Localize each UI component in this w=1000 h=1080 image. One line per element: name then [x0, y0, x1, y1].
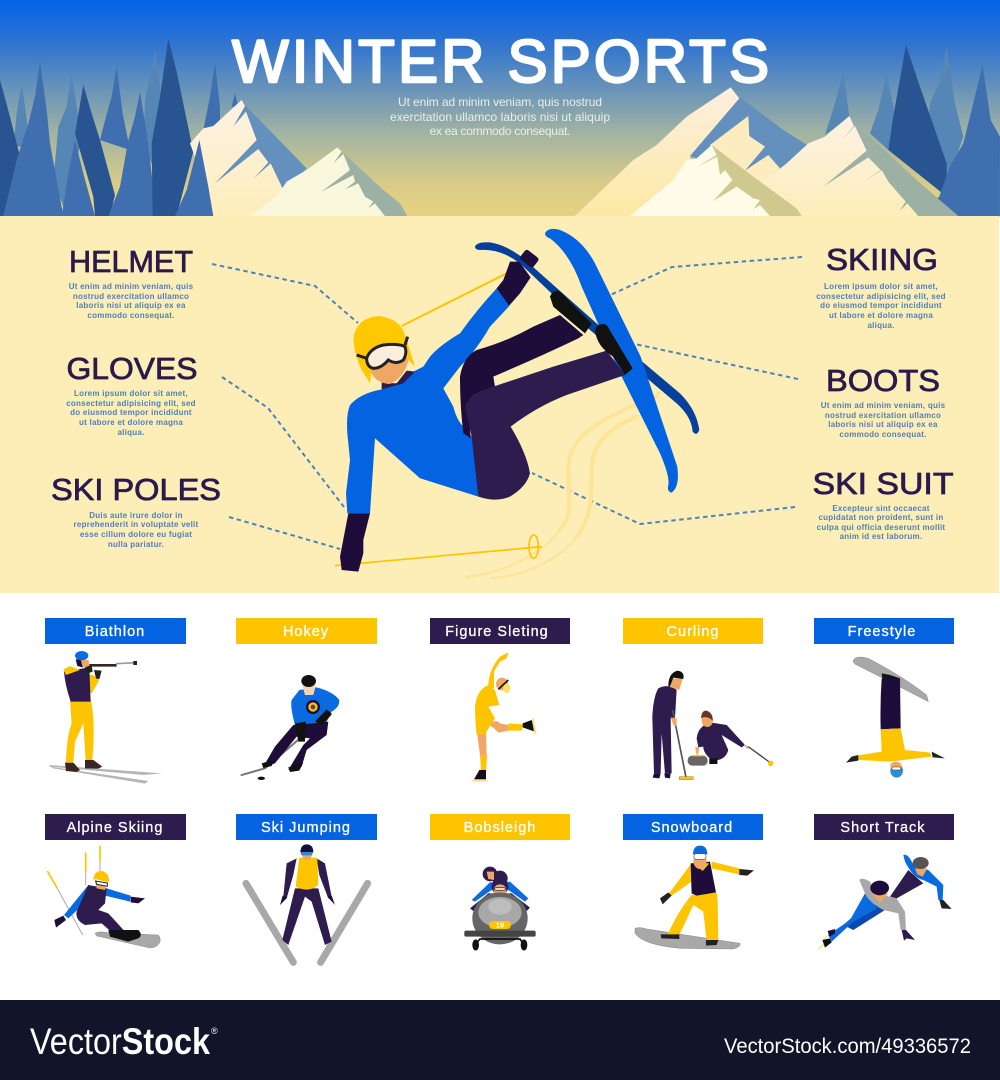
icon: figure skater — [471, 652, 537, 782]
text block: helmet: commodo consequat. — [87, 311, 175, 320]
text block: ski poles: esse cillum dolore eu fugiat — [80, 530, 192, 539]
back boot — [550, 291, 592, 333]
footer logo: ® — [211, 1026, 218, 1036]
text block: boots: laboris nisi ut aliquip ex ea — [828, 420, 938, 429]
icon: bobsleigh: 19 — [496, 921, 504, 930]
icon: hockey player — [241, 675, 339, 780]
title: WINTER SPORTS — [232, 28, 769, 95]
label: Ski Jumping — [236, 814, 377, 840]
ski poles callout line — [229, 517, 340, 549]
helmet callout line — [212, 264, 358, 323]
label: Hokey: Hokey — [283, 624, 329, 640]
subtitle text — [390, 95, 610, 138]
ski binding — [519, 249, 540, 269]
label: Figure Sleting — [430, 618, 570, 644]
left forest — [0, 38, 238, 216]
back mountain — [690, 97, 810, 183]
text block: skiing: SKIING — [826, 242, 938, 277]
icon: snowboarder — [635, 846, 754, 949]
panel: cream equipment panel — [0, 216, 999, 593]
label: Alpine Skiing: Alpine Skiing — [67, 820, 163, 836]
label: Freestyle: Freestyle — [848, 624, 916, 640]
icon: bobsleigh — [464, 867, 536, 951]
text block: ski suit: SKI SUIT — [812, 466, 954, 501]
text block: ski suit — [812, 466, 954, 541]
front mountain snow — [630, 145, 770, 216]
text block: gloves: GLOVES — [66, 351, 198, 386]
subtitle text: ex ea commodo consequat. — [430, 124, 570, 138]
text block: boots: nostrud exercitation ullamco — [825, 411, 941, 420]
front ski — [545, 229, 678, 493]
text block: ski poles: reprehenderit in voluptate velit — [74, 520, 199, 529]
helmet — [353, 316, 415, 383]
icon: curling players — [652, 671, 773, 780]
upper glove — [497, 262, 531, 307]
text block: helmet: laboris nisi ut aliquip ex ea — [76, 301, 186, 310]
far right mountain snow — [757, 116, 918, 216]
text block: ski suit: cupidatat non proident, sunt in — [818, 513, 944, 522]
text block: gloves — [66, 351, 198, 437]
label: Snowboard: Snowboard — [651, 820, 733, 836]
icon: alpine skier — [47, 846, 160, 948]
ski suit callout line — [532, 473, 795, 524]
neck — [382, 371, 415, 389]
far right mountain shadow — [823, 126, 958, 216]
label: Snowboard — [623, 814, 763, 840]
text block: gloves: consectetur adipisicing elit, sed — [66, 399, 196, 408]
inner snow ridge — [710, 116, 780, 183]
subtitle text: Ut enim ad minim veniam, quis nostrud — [398, 95, 602, 109]
label: Alpine Skiing — [45, 814, 186, 840]
text block: skiing: aliqua. — [867, 321, 895, 330]
label: Short Track — [814, 814, 954, 840]
label: Bobsleigh: Bobsleigh — [464, 820, 536, 836]
left main mountain — [190, 100, 307, 216]
front leg — [465, 351, 625, 500]
text block: skiing: do eiusmod tempor incididunt — [820, 301, 942, 310]
back mountain snow — [575, 87, 739, 216]
icon: freestyle snowboarder — [846, 657, 945, 778]
label: Short Track: Short Track — [840, 820, 926, 836]
lower ski pole — [335, 535, 542, 566]
icon: short track skaters — [818, 855, 952, 949]
text block: ski poles: SKI POLES — [51, 472, 221, 507]
upper ski pole — [402, 267, 520, 326]
icon: ski jumper — [246, 844, 368, 962]
footer image id: VectorStock.com/49336572 — [724, 1035, 971, 1058]
text block: boots — [821, 363, 946, 439]
text block: ski poles: Duis aute irure dolor in — [89, 511, 183, 520]
snow trails — [467, 393, 658, 578]
gloves callout line — [222, 377, 344, 507]
label: Ski Jumping: Ski Jumping — [261, 820, 351, 836]
text block: gloves: aliqua. — [117, 428, 145, 437]
label: Biathlon: Biathlon — [85, 624, 145, 640]
back leg — [460, 315, 583, 438]
skiing callout line — [608, 257, 802, 296]
text block: helmet: nostrud exercitation ullamco — [73, 292, 189, 301]
text block: boots: BOOTS — [826, 363, 940, 398]
text block: skiing: ut labore et dolore magna — [829, 311, 933, 320]
text block: ski poles: nulla pariatur. — [108, 540, 164, 549]
text block: helmet: HELMET — [69, 244, 193, 279]
text block: skiing — [816, 242, 946, 330]
text block: gloves: ut labore et dolore magna — [79, 418, 183, 427]
footer logo: VectorStock — [30, 1021, 210, 1062]
back ski — [475, 242, 699, 434]
ski suit torso — [346, 288, 509, 513]
text block: skiing: Lorem ipsum dolor sit amet, — [824, 282, 938, 291]
text block: ski poles — [51, 472, 221, 549]
text block: gloves: do eiusmod tempor incididunt — [70, 408, 192, 417]
label: Bobsleigh — [430, 814, 570, 840]
label: Freestyle — [814, 618, 954, 644]
lower glove — [340, 513, 370, 572]
label: Biathlon — [45, 618, 186, 644]
right forest — [825, 45, 1000, 216]
footer bar — [0, 1000, 1000, 1080]
text block: gloves: Lorem ipsum dolor sit amet, — [74, 389, 188, 398]
front boot — [595, 324, 633, 375]
goggles — [357, 337, 408, 368]
subtitle text: exercitation ullamco laboris nisi ut aliquip — [390, 110, 610, 124]
label: Curling: Curling — [667, 624, 719, 640]
text block: ski suit: culpa qui officia deserunt mollit — [817, 523, 945, 532]
main skier illustration — [335, 229, 699, 578]
label: Curling — [623, 618, 763, 644]
text block: boots: Ut enim ad minim veniam, quis — [821, 401, 946, 410]
label: Hokey — [236, 618, 377, 644]
right mountains — [575, 87, 958, 216]
front mountain shadow — [697, 145, 802, 216]
left front tree — [175, 140, 213, 216]
text block: boots: commodo consequat. — [839, 430, 927, 439]
boots callout line — [630, 343, 798, 379]
icon: biathlon athlete — [49, 651, 162, 784]
text block: helmet: Ut enim ad minim veniam, quis — [69, 282, 194, 291]
text block: ski suit: Excepteur sint occaecat — [832, 504, 930, 513]
sky gradient header — [0, 0, 1000, 217]
text block: helmet — [69, 244, 194, 320]
text block: ski suit: anim id est laborum. — [840, 532, 922, 541]
left front mountain — [250, 147, 407, 216]
text block: skiing: consectetur adipisicing elit, sed — [816, 292, 946, 301]
face — [370, 347, 408, 384]
label: Figure Sleting: Figure Sleting — [445, 624, 549, 640]
